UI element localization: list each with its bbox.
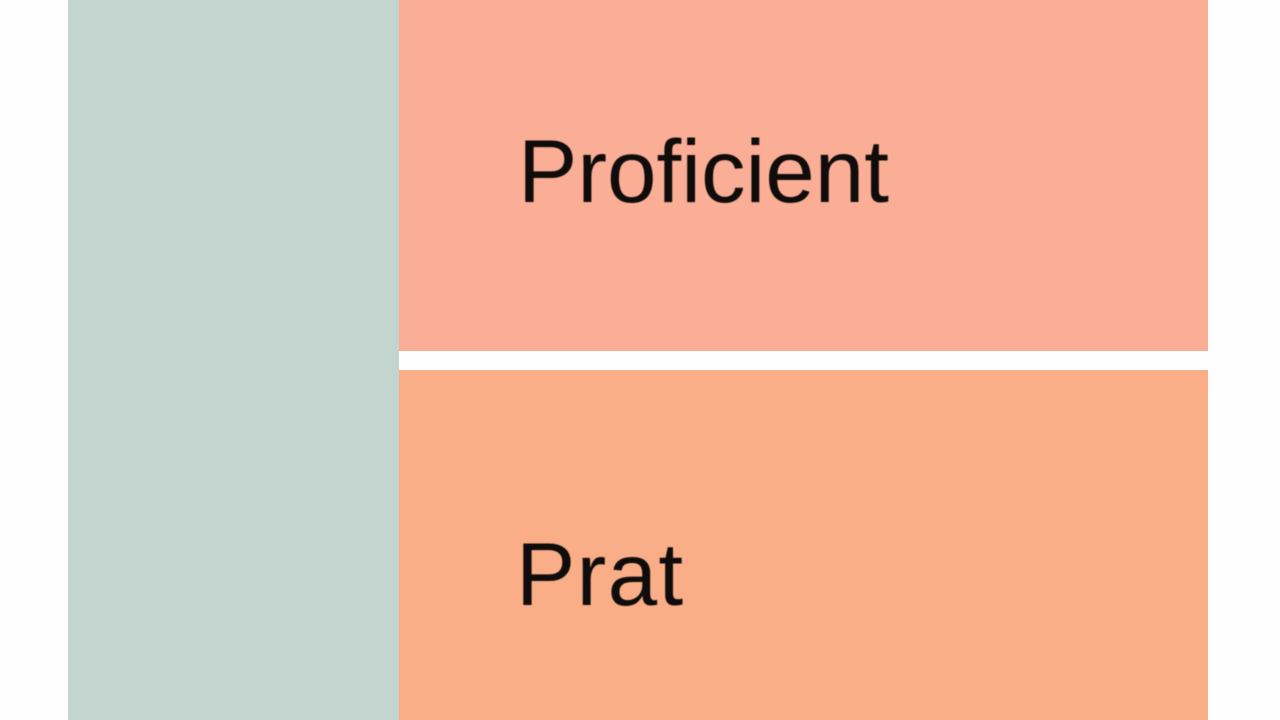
panel: pratt row bbox=[399, 370, 1208, 720]
panel: left column bbox=[68, 0, 399, 720]
label: Proficient: Proficient bbox=[518, 121, 889, 221]
panel: proficient row bbox=[399, 0, 1208, 351]
label: Prat: Prat bbox=[516, 524, 684, 624]
